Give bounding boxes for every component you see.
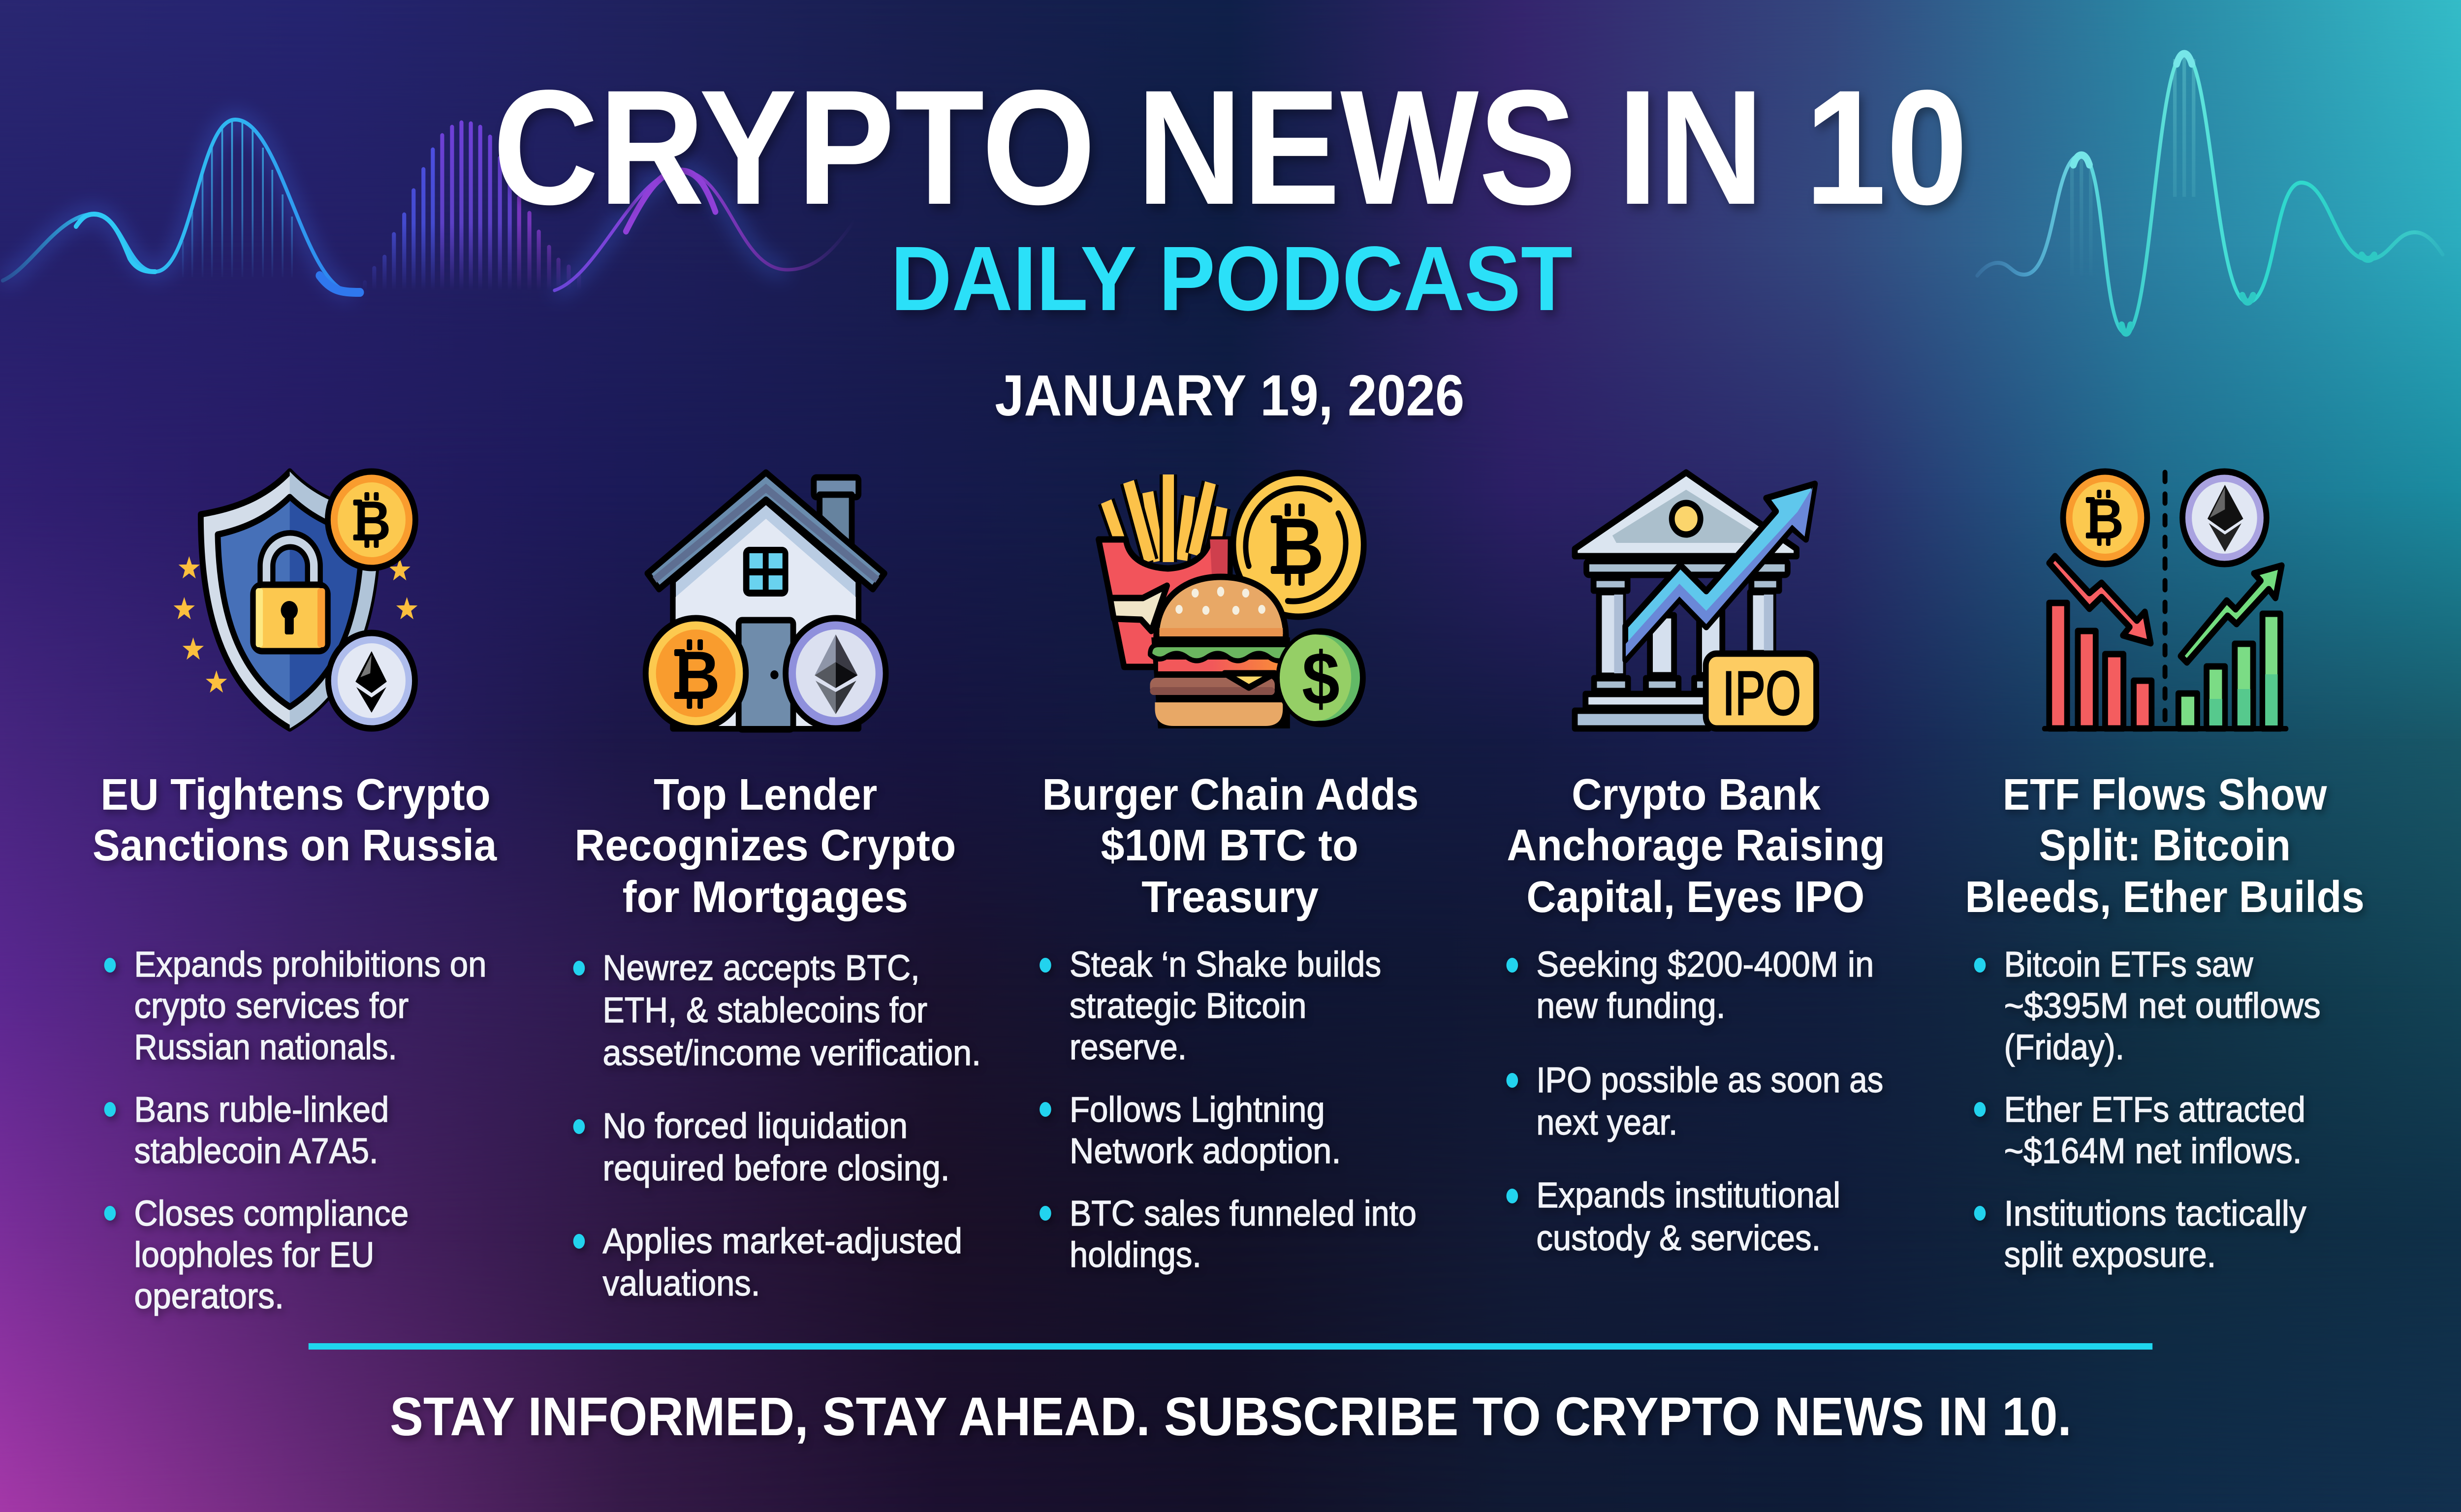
bullet 1 (1507, 945, 1874, 1026)
heading: Treasury (1141, 872, 1319, 922)
bullet 3: custody & services. (1536, 1218, 1821, 1258)
bullet 2: Follows Lightning (1070, 1090, 1325, 1130)
bullet 2: Bans ruble-linked (134, 1090, 389, 1130)
bullet 3: Expands institutional (1536, 1175, 1840, 1215)
panel: burger chain (1040, 473, 1419, 1275)
heading: Recognizes Crypto (574, 820, 956, 870)
heading: $10M BTC to (1101, 820, 1358, 870)
bullet 1: asset/income verification. (603, 1033, 981, 1073)
bullet 2: No forced liquidation (603, 1106, 908, 1146)
heading (1507, 770, 1885, 922)
heading: ETF Flows Show (2003, 770, 2328, 819)
bullet 2 (573, 1106, 950, 1188)
right waveform (1977, 54, 2443, 333)
subtitle: DAILY PODCAST (891, 227, 1573, 330)
heading (1965, 770, 2365, 922)
heading: Anchorage Raising (1507, 820, 1885, 870)
footer call to action: STAY INFORMED, STAY AHEAD. SUBSCRIBE TO CRYPTO NEWS IN 10. (390, 1387, 2072, 1447)
heading: Burger Chain Adds (1042, 770, 1419, 819)
title: CRYPTO NEWS IN 10 (493, 57, 1968, 239)
bullet 1: new funding. (1536, 986, 1726, 1026)
bullet 2 (1507, 1060, 1883, 1142)
bullet 3: Applies market-adjusted (603, 1221, 962, 1261)
bullet 1: Seeking $200-400M in (1536, 945, 1874, 984)
heading: Bleeds, Ether Builds (1965, 872, 2365, 922)
panel: ETF flows (1965, 472, 2365, 1275)
heading: Split: Bitcoin (2039, 820, 2291, 870)
bullet list (1040, 945, 1417, 1275)
bullet 2 (1040, 1090, 1341, 1171)
bullet 3: BTC sales funneled into (1070, 1194, 1417, 1233)
bullet 1: Newrez accepts BTC, (603, 948, 920, 988)
heading: EU Tightens Crypto (100, 770, 491, 819)
bullet 3: loopholes for EU (134, 1235, 374, 1275)
heading: Capital, Eyes IPO (1526, 872, 1864, 922)
icon: bank with arrow and IPO badge: IPO (1722, 659, 1801, 728)
bullet 3: operators. (134, 1276, 284, 1316)
bullet 3: holdings. (1070, 1235, 1201, 1275)
icon: split bitcoin and ether charts (2042, 472, 2288, 731)
bullet 2: Network adoption. (1070, 1131, 1341, 1171)
bullet 1: (Friday). (2004, 1027, 2124, 1067)
heading (574, 770, 956, 922)
icon: burger, fries and coins: B (1272, 501, 1325, 591)
bullet 3 (104, 1194, 409, 1316)
icon: split bitcoin and ether charts: B (2087, 488, 2124, 551)
icon: burger, fries and coins: $ (1302, 637, 1340, 720)
bullet 1: ETH, & stablecoins for (603, 990, 927, 1030)
bullet 3 (1974, 1194, 2306, 1275)
bullet 1: crypto services for (134, 986, 409, 1026)
bullet 1: Bitcoin ETFs saw (2004, 945, 2253, 984)
icon: bank with arrow and IPO badge (1575, 472, 1816, 728)
bullet list (1974, 945, 2321, 1275)
bullet 2 (104, 1090, 389, 1171)
bullet 2 (1974, 1090, 2305, 1171)
bullet 1: ~$395M net outflows (2004, 986, 2321, 1026)
bullet 1 (104, 945, 486, 1067)
bullet 1 (1974, 945, 2321, 1067)
bullet list (1507, 945, 1883, 1258)
bullet 3 (573, 1221, 962, 1303)
icon: shield with padlock and coins: B (354, 490, 391, 553)
icon: house with coins: B (675, 637, 720, 714)
bullet 1: reserve. (1070, 1027, 1187, 1067)
heading (93, 770, 497, 870)
bullet 1 (1040, 945, 1381, 1067)
bullet 1 (573, 948, 981, 1073)
bullet 1: Expands prohibitions on (134, 945, 486, 984)
bullet 2: Ether ETFs attracted (2004, 1090, 2305, 1130)
bullet 2: next year. (1536, 1102, 1677, 1142)
bullet list (104, 945, 486, 1316)
bullet 3: valuations. (603, 1263, 760, 1303)
bullet 1: Russian nationals. (134, 1027, 397, 1067)
bullet 3: Closes compliance (134, 1194, 409, 1233)
bullet 3: Institutions tactically (2004, 1194, 2306, 1233)
bullet 2: IPO possible as soon as (1536, 1060, 1883, 1100)
heading: for Mortgages (623, 872, 908, 922)
bullet 3 (1040, 1194, 1417, 1275)
left waveform (2, 120, 855, 292)
panel: EU sanctions (93, 472, 497, 1316)
panel: mortgages (573, 472, 981, 1303)
bullet 2: stablecoin A7A5. (134, 1131, 379, 1171)
date: JANUARY 19, 2026 (995, 363, 1464, 428)
heading: Top Lender (654, 770, 877, 819)
heading (1042, 770, 1419, 922)
bullet 1: strategic Bitcoin (1070, 986, 1306, 1026)
icon: shield with padlock and coins (174, 472, 417, 728)
bullet list (573, 948, 981, 1303)
bullet 2: required before closing. (603, 1148, 950, 1188)
heading: Crypto Bank (1572, 770, 1821, 819)
bullet 3 (1507, 1175, 1840, 1258)
icon: house with coins (646, 472, 886, 731)
icon: burger, fries and coins (1099, 473, 1364, 728)
panel: crypto bank (1507, 472, 1885, 1258)
bullet 1: Steak ‘n Shake builds (1070, 945, 1381, 984)
bullet 2: ~$164M net inflows. (2004, 1131, 2302, 1171)
heading: Sanctions on Russia (93, 820, 497, 870)
bullet 3: split exposure. (2004, 1235, 2216, 1275)
